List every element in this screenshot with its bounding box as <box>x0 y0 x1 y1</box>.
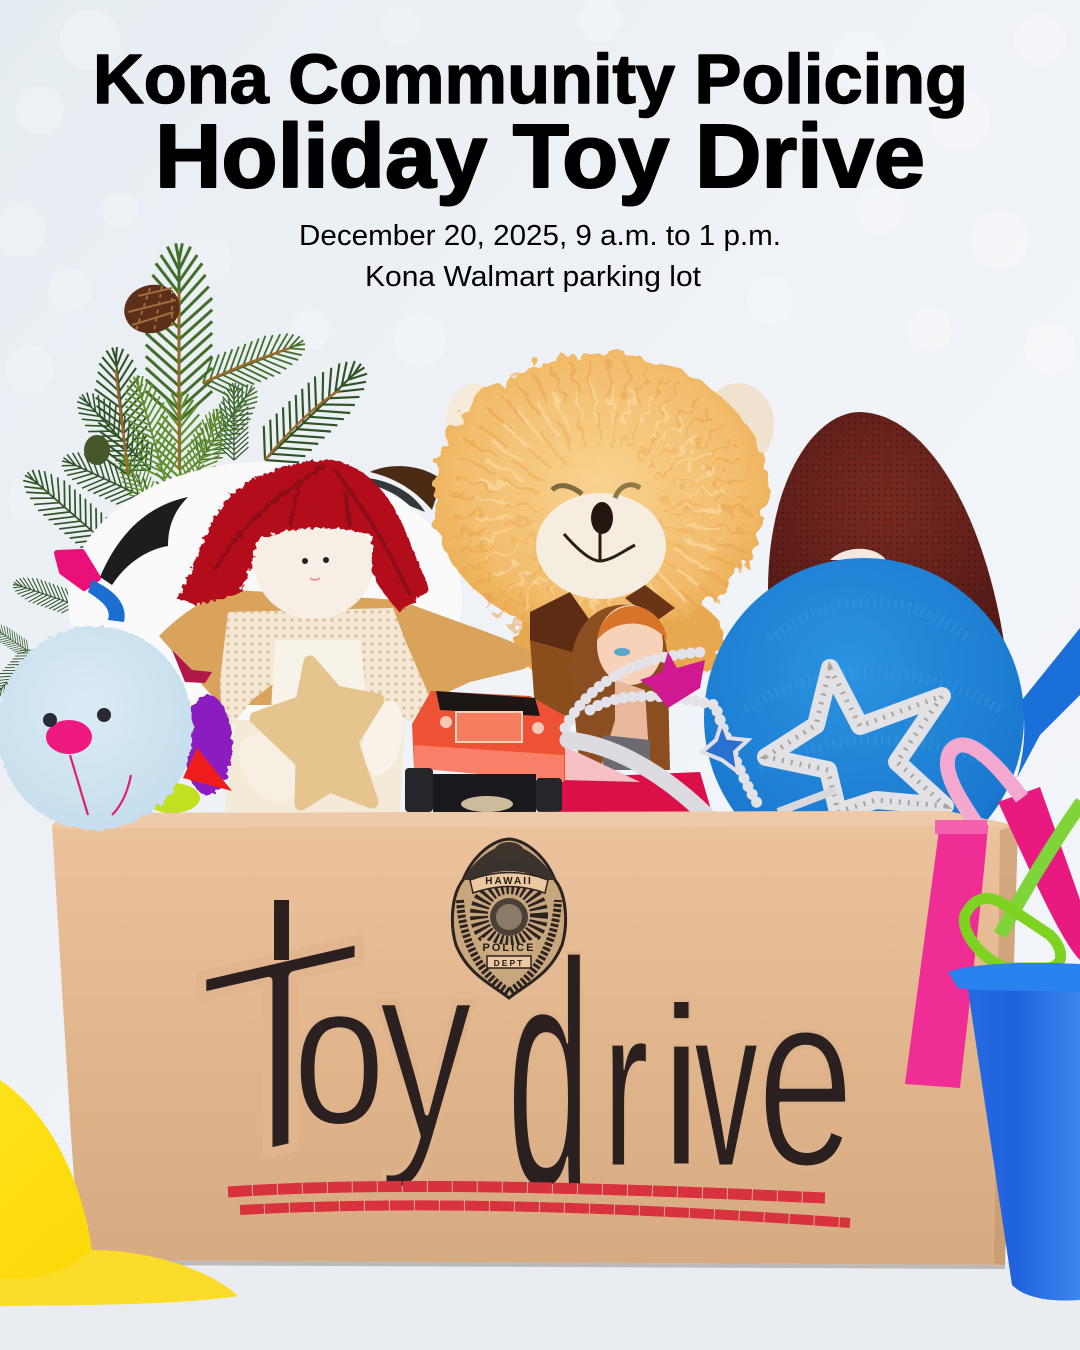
police badge: POLICE <box>483 942 535 954</box>
handwriting: toy drive: r <box>603 960 648 1214</box>
handwriting: toy drive: e <box>757 939 854 1218</box>
floor <box>0 1262 1080 1350</box>
sand shovel <box>964 802 1080 968</box>
yellow hard hat <box>0 1080 238 1306</box>
soccer ball <box>68 462 462 738</box>
handwriting: toy drive: o <box>293 942 385 1165</box>
doll toy head <box>570 605 670 770</box>
plush caterpillar <box>0 552 232 830</box>
blue ball <box>704 558 1024 878</box>
football <box>768 412 1004 642</box>
toy jeep <box>405 691 565 812</box>
cardboard box <box>52 811 1018 1269</box>
police badge: HAWAII <box>485 876 533 887</box>
handwriting: toy drive <box>195 878 854 1253</box>
police badge <box>452 839 566 998</box>
police badge: DEPT <box>494 958 524 968</box>
handwriting: toy drive: v <box>695 959 757 1213</box>
red filling <box>558 745 712 813</box>
bokeh lights <box>0 0 1076 522</box>
icon: pine cone <box>119 279 185 339</box>
blue tube toy <box>1017 628 1080 778</box>
handwriting: toy drive: i <box>660 959 703 1213</box>
rag doll <box>159 460 531 813</box>
red underlines <box>228 1186 850 1223</box>
event date: December 20, 2025, 9 a.m. to 1 p.m. <box>299 220 781 252</box>
toy tiara <box>565 652 760 814</box>
event location: Kona Walmart parking lot <box>365 261 701 293</box>
handwriting: toy drive: T <box>195 878 366 1230</box>
doll body <box>176 460 431 813</box>
bear muzzle <box>536 493 666 599</box>
handwriting: toy drive: d <box>507 896 591 1253</box>
bow <box>530 592 600 680</box>
title line 2: Holiday Toy Drive <box>155 107 925 207</box>
silver star <box>766 668 945 812</box>
doll hair <box>176 460 428 613</box>
teddy bear <box>432 353 774 720</box>
pine branch <box>0 243 380 702</box>
handwriting: toy drive: y <box>378 906 474 1191</box>
blue bucket <box>948 963 1080 1300</box>
title line 1: Kona Community Policing <box>93 40 968 118</box>
jump rope <box>905 745 1080 1088</box>
